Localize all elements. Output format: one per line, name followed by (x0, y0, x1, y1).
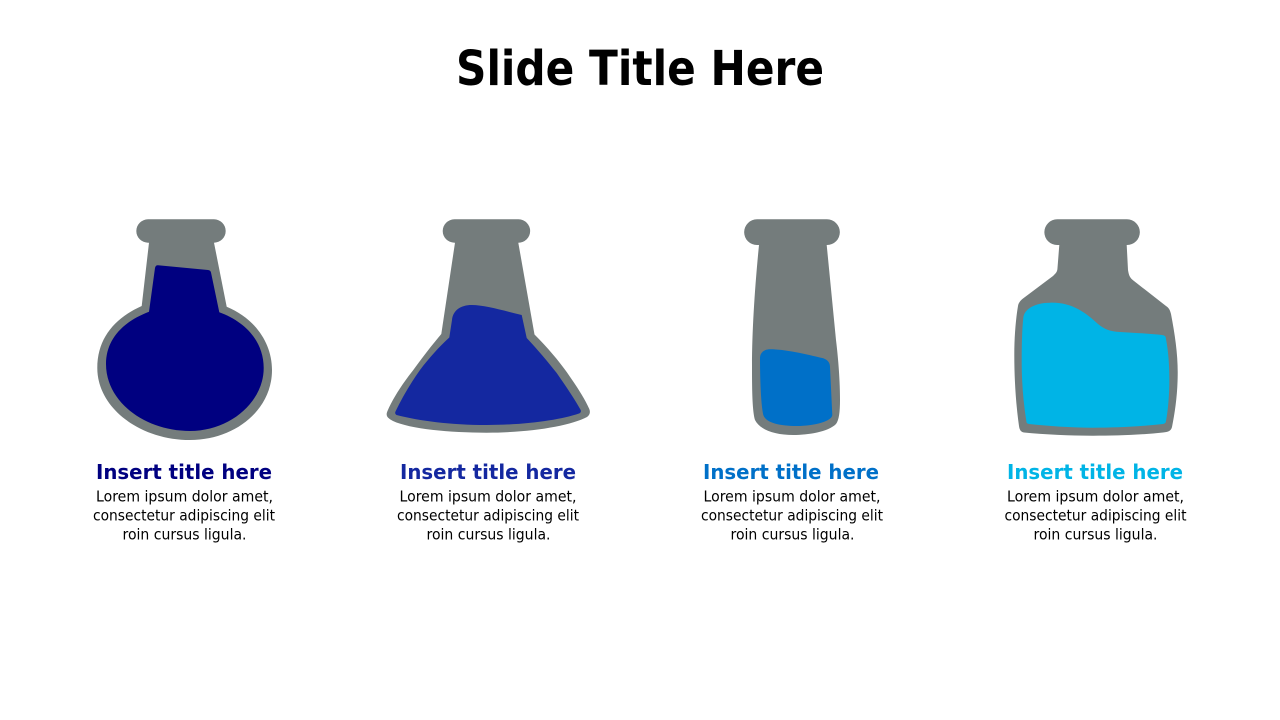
text: label one (93, 460, 275, 544)
text: label one: consectetur adipiscing elit (93, 506, 275, 524)
panel: test tube bottle (701, 219, 883, 544)
text: label four (1004, 460, 1187, 544)
text: label one: roin cursus ligula. (122, 526, 246, 544)
flask liquid (106, 265, 264, 431)
panel: round flask (93, 219, 275, 544)
icon: conical flask outline (387, 219, 590, 433)
text: label three (701, 460, 883, 544)
panel: square bottle (1004, 219, 1187, 544)
text: label two: Lorem ipsum dolor amet, (400, 488, 576, 506)
text: label two (397, 460, 579, 544)
text: label three: Insert title here (703, 460, 879, 484)
title: Slide Title Here (456, 41, 824, 97)
text: label three: Lorem ipsum dolor amet, (704, 488, 880, 506)
flask liquid (395, 305, 581, 425)
text: label four: consectetur adipiscing elit (1004, 506, 1187, 524)
text: label two: consectetur adipiscing elit (397, 506, 579, 524)
text: label three: roin cursus ligula. (730, 526, 854, 544)
text: label three: consectetur adipiscing elit (701, 506, 883, 524)
text: label four: Lorem ipsum dolor amet, (1007, 488, 1184, 506)
icon: square bottle outline (1014, 219, 1178, 436)
text: label four: roin cursus ligula. (1034, 526, 1158, 544)
bottle liquid (1022, 303, 1169, 428)
icon: tube bottle outline (744, 219, 840, 435)
tube liquid (760, 349, 832, 426)
text: label one: Lorem ipsum dolor amet, (96, 488, 273, 506)
text: label four: Insert title here (1007, 460, 1183, 484)
text: label two: roin cursus ligula. (426, 526, 550, 544)
text: label two: Insert title here (400, 460, 576, 484)
text: label one: Insert title here (96, 460, 272, 484)
panel: conical flask (387, 219, 590, 544)
icon: round flask outline (97, 219, 272, 440)
